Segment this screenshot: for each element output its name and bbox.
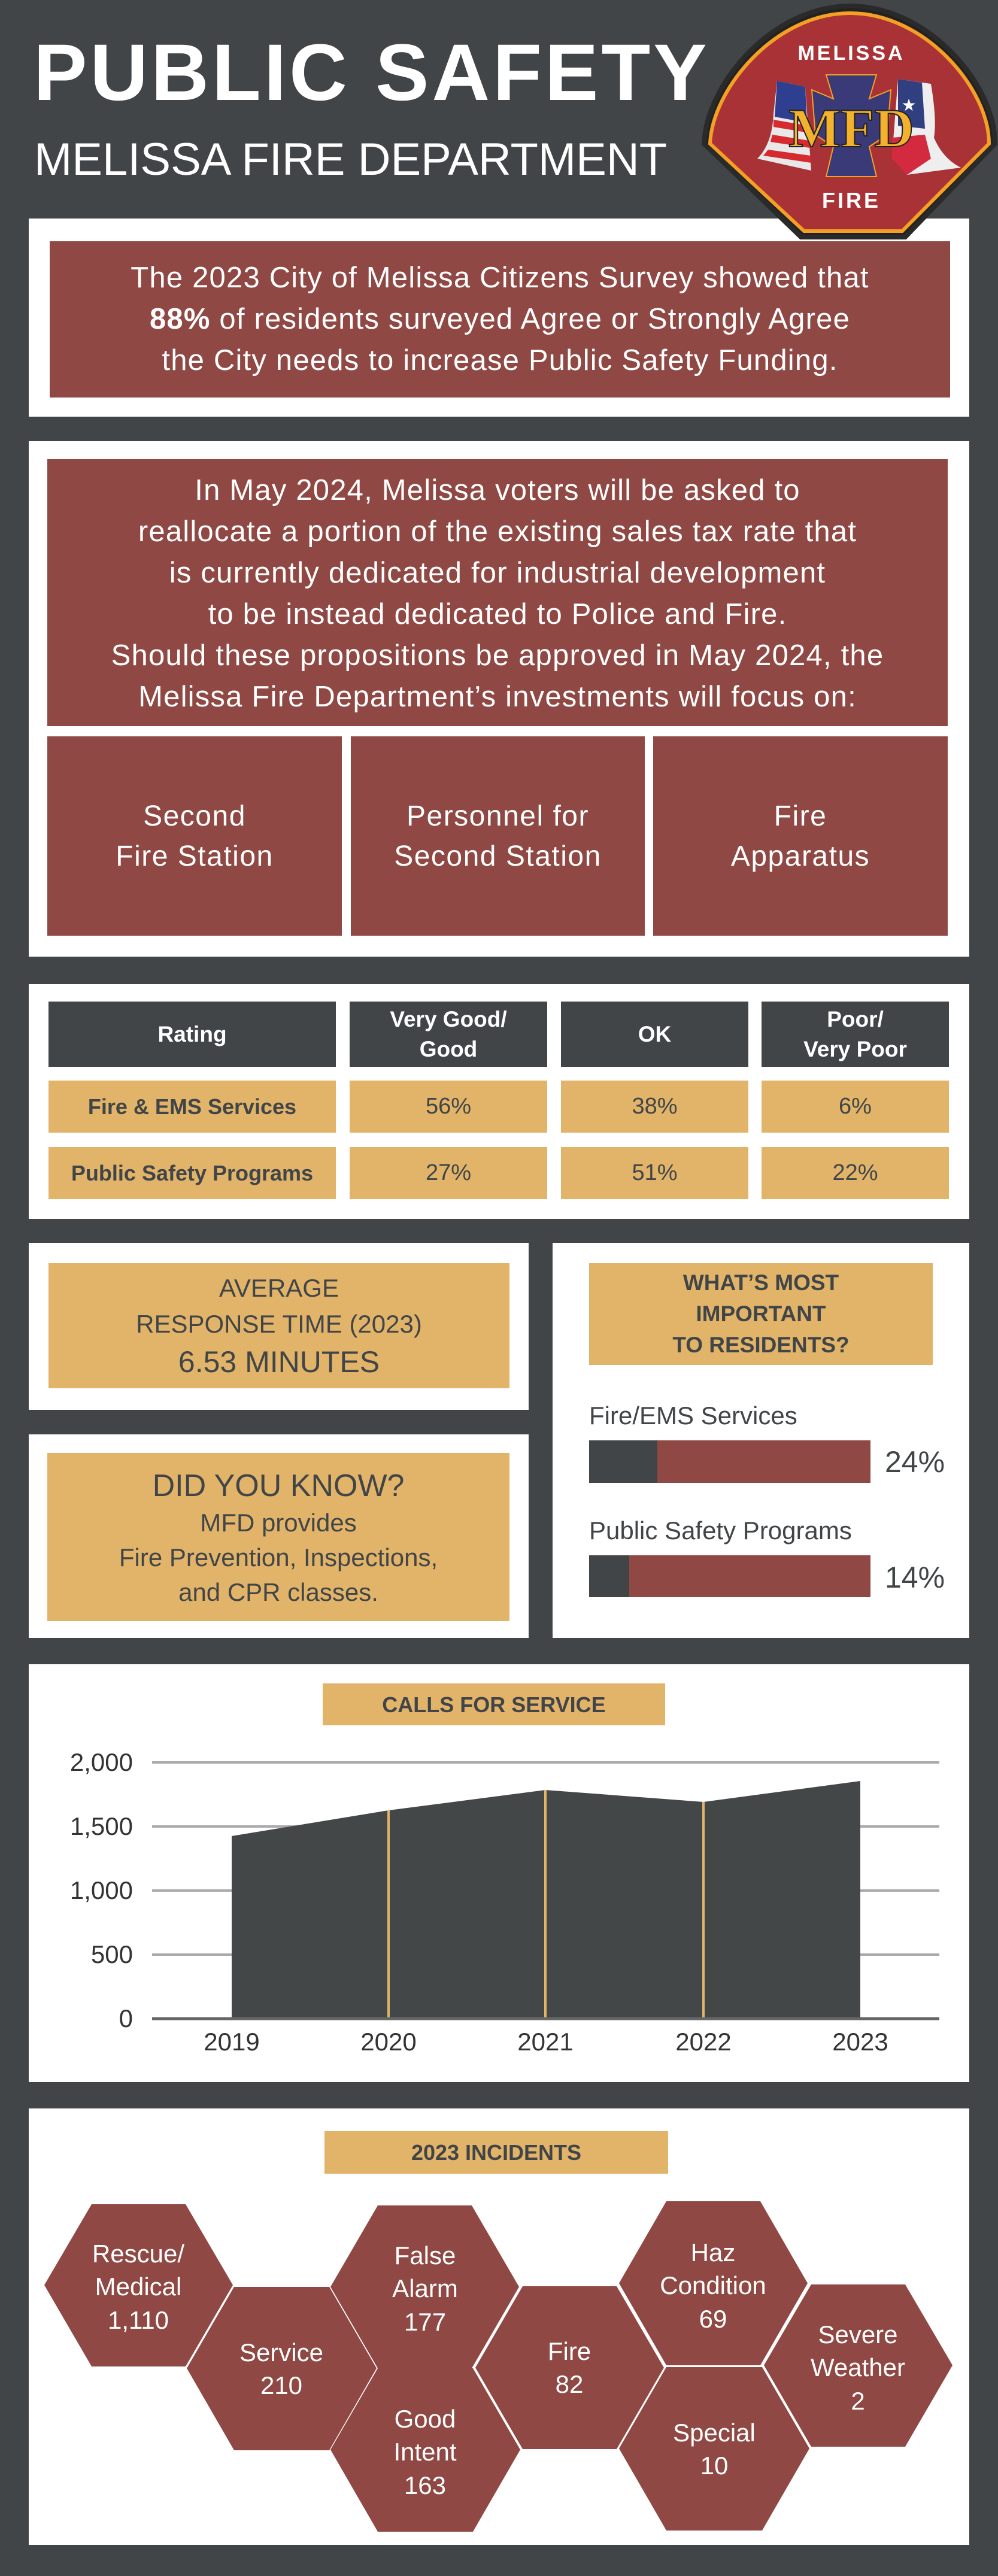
logo: Melissa Fire badge	[702, 4, 997, 239]
text block: survey statement	[50, 241, 950, 398]
hexagon: fire: 82	[556, 2370, 583, 2398]
callout: average response time: AVERAGE	[219, 1274, 339, 1302]
table row: Public Safety Programs	[48, 1147, 949, 1199]
bar: Fire/EMS 24%	[589, 1440, 870, 1483]
hexagon: haz condition: Haz	[691, 2238, 735, 2266]
heading: calls for service: CALLS FOR SERVICE	[382, 1692, 606, 1717]
hexagon: service	[187, 2287, 377, 2450]
label: Fire/EMS: Fire/EMS Services	[589, 1401, 797, 1430]
box: personnel: Personnel for	[407, 800, 589, 832]
logo: Melissa Fire badge: MFD	[788, 98, 914, 159]
maltese cross	[812, 75, 891, 177]
table row: Fire & EMS: 56%	[426, 1094, 471, 1119]
panel: 2023 incidents	[29, 2108, 969, 2545]
heading: what's most important: TO RESIDENTS?	[672, 1333, 850, 1357]
hexagon: good intent: 163	[404, 2471, 446, 2499]
hexagon: special: 10	[700, 2451, 728, 2480]
table header: Very Poor	[803, 1037, 907, 1061]
value: 14%: 14%	[885, 1561, 945, 1594]
text block: propositions intro: reallocate a portion of the existing sales tax rate that	[138, 515, 857, 548]
y axis labels	[70, 1748, 133, 2032]
hexagon: rescue/medical	[44, 2204, 233, 2366]
hexagon: fire: Fire	[548, 2337, 591, 2365]
table header: Very Good/	[390, 1007, 507, 1031]
hexagon: special: Special	[673, 2419, 756, 2447]
panel: most important to residents	[553, 1243, 969, 1638]
panel: survey funding	[29, 219, 969, 417]
hexagon: severe weather: Severe	[818, 2320, 898, 2349]
hexagon: haz condition: Condition	[660, 2271, 766, 2299]
x axis labels: 2022	[675, 2028, 732, 2056]
x axis labels: 2021	[517, 2028, 574, 2056]
table header: OK	[638, 1021, 671, 1046]
box: fire apparatus	[653, 736, 948, 936]
table header: Rating	[157, 1021, 227, 1046]
panel: May 2024 propositions	[29, 441, 969, 957]
table header: Good	[420, 1037, 477, 1061]
box: second fire station: Fire Station	[116, 841, 274, 872]
callout: average response time	[48, 1263, 509, 1388]
table row: Public Safety Programs: 51%	[632, 1160, 678, 1185]
box: personnel: Second Station	[394, 841, 602, 872]
x axis labels	[204, 2028, 888, 2056]
hexagon: false alarm	[330, 2205, 519, 2368]
US flag	[757, 81, 811, 171]
x axis labels: 2023	[832, 2028, 888, 2056]
box: second fire station: Second	[143, 800, 246, 832]
callout: did you know: and CPR classes.	[178, 1578, 378, 1606]
panel: rating table	[29, 984, 969, 1219]
text block: propositions intro: Melissa Fire Department’s investments will focus on:	[138, 681, 857, 713]
table row: Fire & EMS	[48, 1081, 949, 1133]
hexagon: good intent	[330, 2368, 520, 2532]
hexagon: false alarm: 177	[404, 2308, 446, 2336]
hexagon: rescue/medical: Rescue/	[92, 2240, 184, 2268]
hexagon: severe weather	[764, 2284, 953, 2447]
panel: did you know	[29, 1434, 529, 1638]
text block: survey statement: 88% of residents surveyed Agree or Strongly Agree	[150, 303, 850, 335]
hexagon: severe weather: Weather	[811, 2353, 905, 2381]
hexagon: rescue/medical: 1,110	[108, 2306, 169, 2334]
panel: response time	[29, 1243, 529, 1410]
callout: did you know	[47, 1453, 509, 1621]
box: second fire station	[47, 736, 342, 936]
heading: what's most important	[589, 1263, 933, 1365]
text block: survey statement: the City needs to increase Public Safety Funding.	[162, 344, 838, 377]
subtitle: MELISSA FIRE DEPARTMENT	[34, 134, 667, 185]
heading: 2023 incidents	[324, 2131, 668, 2174]
table row: Fire & EMS: 6%	[839, 1094, 872, 1119]
area chart: calls per year	[232, 1781, 860, 2019]
hexagon: false alarm: False	[395, 2241, 456, 2269]
box: fire apparatus: Apparatus	[731, 841, 870, 872]
heading: what's most important: IMPORTANT	[696, 1301, 826, 1326]
hexagon: fire	[475, 2286, 664, 2449]
text block: propositions intro: to be instead dedicated to Police and Fire.	[208, 598, 787, 630]
callout: did you know: DID YOU KNOW?	[153, 1468, 404, 1503]
hexagon: service: Service	[239, 2338, 323, 2366]
title: PUBLIC SAFETY	[34, 28, 710, 117]
table header	[48, 1002, 949, 1067]
y axis labels: 500	[91, 1940, 133, 1968]
text block: propositions intro: is currently dedicated for industrial development	[169, 557, 826, 589]
text block: propositions intro	[47, 459, 948, 726]
value: 24%: 24%	[885, 1445, 945, 1479]
hexagon: rescue/medical: Medical	[95, 2272, 181, 2301]
hexagon: good intent: Good	[395, 2405, 456, 2433]
hexagon: haz condition	[619, 2201, 808, 2365]
Texas flag	[892, 79, 961, 175]
hexagon: severe weather: 2	[851, 2387, 865, 2415]
text block: propositions intro: Should these propositions be approved in May 2024, the	[111, 639, 884, 672]
heading: 2023 incidents: 2023 INCIDENTS	[411, 2140, 581, 2165]
hexagon: service: 210	[260, 2371, 302, 2399]
text block: propositions intro: In May 2024, Melissa voters will be asked to	[195, 474, 800, 506]
x axis labels: 2020	[360, 2028, 417, 2056]
table row: Fire & EMS: 38%	[632, 1094, 678, 1119]
label: Public Safety Programs: Public Safety Programs	[589, 1516, 852, 1545]
table row: Fire & EMS: Fire & EMS Services	[88, 1094, 296, 1118]
Texas flag: ★	[901, 96, 917, 114]
heading: what's most important: WHAT’S MOST	[683, 1270, 839, 1295]
box: personnel	[351, 736, 645, 936]
hexagon: good intent: Intent	[393, 2438, 457, 2466]
x axis labels: 2019	[204, 2028, 260, 2056]
logo: Melissa Fire badge: FIRE	[822, 188, 881, 213]
table row: Public Safety Programs: Public Safety Programs	[71, 1160, 313, 1185]
hexagon: false alarm: Alarm	[392, 2274, 458, 2302]
y axis labels: 1,500	[70, 1812, 133, 1840]
box: fire apparatus: Fire	[774, 800, 827, 832]
y axis labels: 1,000	[70, 1876, 133, 1904]
table row: Public Safety Programs: 22%	[832, 1160, 878, 1185]
bar: Public Safety 14%	[589, 1555, 870, 1597]
panel: calls for service chart	[29, 1664, 969, 2082]
y axis labels: 0	[119, 2004, 133, 2032]
heading: calls for service	[323, 1683, 665, 1725]
callout: average response time: 6.53 MINUTES	[178, 1345, 380, 1379]
hexagon: special	[619, 2367, 809, 2531]
table row: Public Safety Programs: 27%	[426, 1160, 471, 1185]
callout: average response time: RESPONSE TIME (2023)	[136, 1310, 422, 1338]
text block: survey statement: The 2023 City of Melissa Citizens Survey showed that	[131, 262, 869, 294]
callout: did you know: MFD provides	[200, 1509, 357, 1537]
logo: Melissa Fire badge: MELISSA	[797, 42, 905, 65]
hexagon: haz condition: 69	[699, 2305, 727, 2333]
y axis labels: 2,000	[70, 1748, 133, 1776]
table header: Poor/	[827, 1007, 884, 1031]
callout: did you know: Fire Prevention, Inspections,	[119, 1543, 438, 1571]
